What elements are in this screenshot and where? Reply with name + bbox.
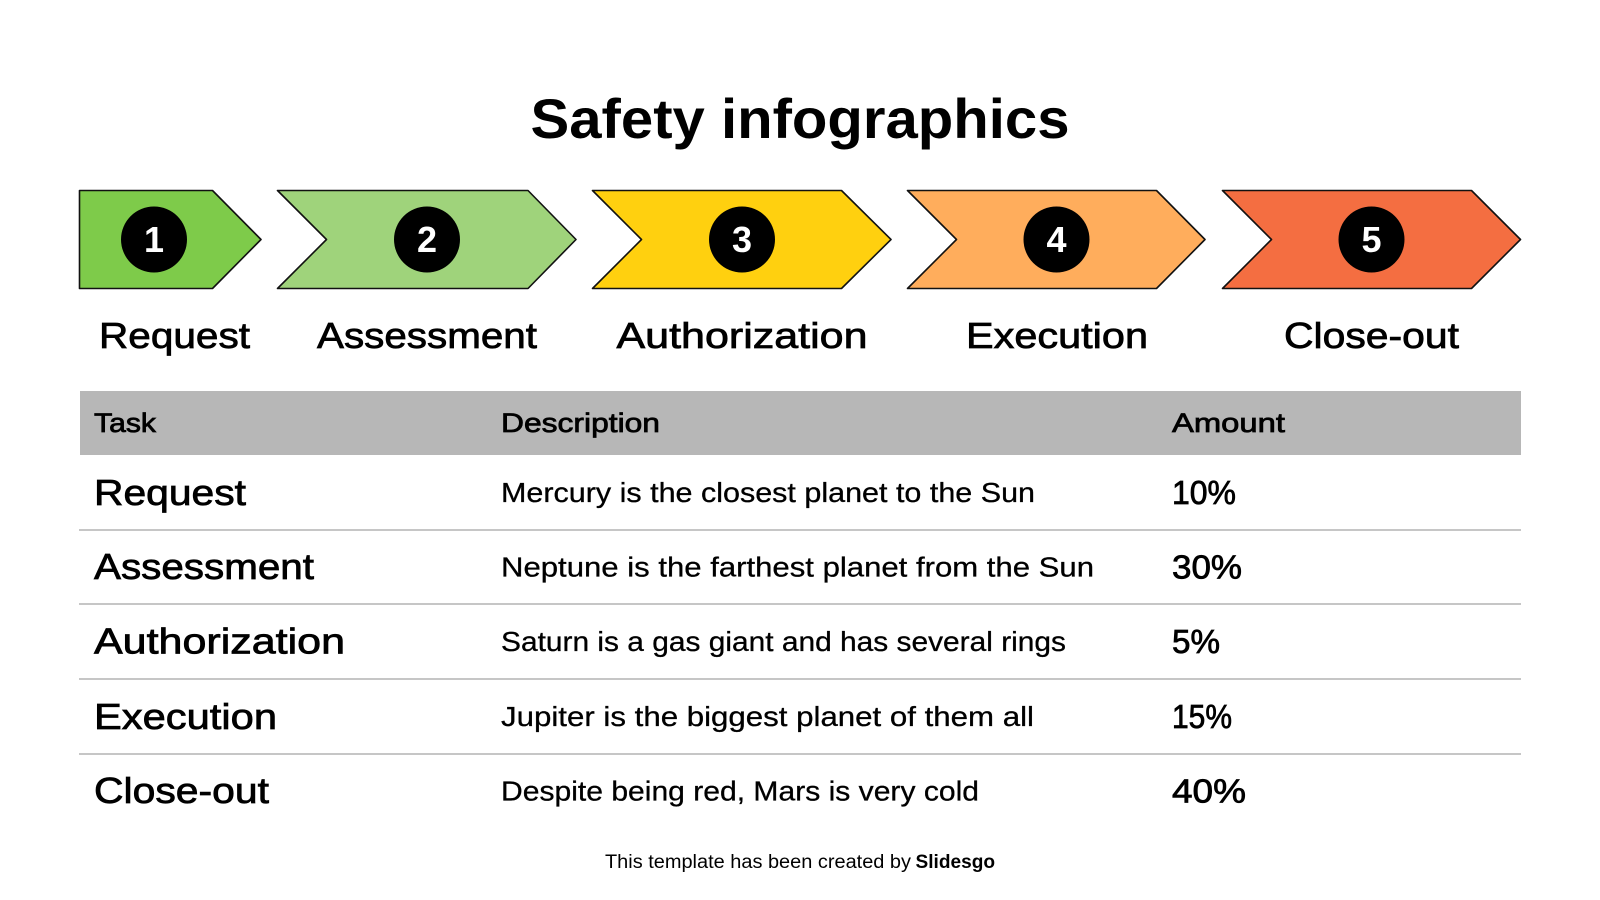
step 1 chevron	[80, 190, 261, 288]
row: Execution	[94, 696, 1232, 737]
row: Assessment: 30%	[1172, 548, 1242, 586]
row: Request: Request	[94, 472, 246, 513]
row: Execution: 15%	[1172, 698, 1232, 735]
step labels: Request	[99, 315, 250, 356]
row divider	[79, 753, 1521, 755]
step 2 chevron: 2	[417, 219, 437, 260]
table header: Task	[94, 408, 157, 438]
row: Authorization: Authorization	[94, 620, 345, 662]
step labels: Execution	[966, 315, 1148, 356]
step 4 chevron: 4	[1046, 219, 1067, 260]
step labels	[99, 315, 1459, 356]
row: Assessment: Neptune is the farthest planet from the Sun	[501, 552, 1094, 582]
row divider	[79, 603, 1521, 605]
title: Safety infographics	[530, 87, 1070, 150]
step 3 chevron: 3	[732, 219, 752, 260]
row: Close-out: Close-out	[94, 770, 269, 811]
row: Authorization: 5%	[1172, 623, 1220, 660]
row: Close-out: Despite being red, Mars is very cold	[501, 776, 979, 806]
row: Request: Mercury is the closest planet to the Sun	[501, 477, 1035, 508]
row: Authorization	[94, 620, 1220, 662]
step 4 chevron	[908, 190, 1205, 288]
step labels: Authorization	[616, 315, 868, 356]
row: Assessment	[94, 546, 1242, 587]
row: Request	[94, 472, 1236, 513]
row divider	[79, 529, 1521, 531]
row: Request: 10%	[1172, 474, 1236, 511]
step 2 chevron	[278, 190, 576, 288]
step labels: Close-out	[1284, 315, 1459, 356]
row divider	[79, 678, 1521, 680]
step 1 chevron: 1	[144, 219, 164, 260]
table header: Amount	[1172, 408, 1286, 438]
step labels: Assessment	[317, 315, 537, 356]
footer credit: Slidesgo	[916, 852, 995, 873]
footer credit: This template has been created by	[605, 852, 912, 873]
row: Close-out: 40%	[1172, 772, 1246, 810]
table	[79, 391, 1521, 811]
row: Close-out	[94, 770, 1246, 811]
table header: Description	[501, 408, 660, 438]
row: Execution: Jupiter is the biggest planet of them all	[501, 701, 1034, 732]
step 5 chevron	[1222, 190, 1520, 288]
row: Execution: Execution	[94, 696, 277, 737]
process chevrons	[80, 190, 1520, 288]
row: Assessment: Assessment	[94, 546, 314, 587]
row: Authorization: Saturn is a gas giant and has several rings	[501, 626, 1066, 657]
step 5 chevron: 5	[1361, 219, 1382, 260]
table header	[80, 391, 1521, 455]
step 3 chevron	[592, 190, 891, 288]
